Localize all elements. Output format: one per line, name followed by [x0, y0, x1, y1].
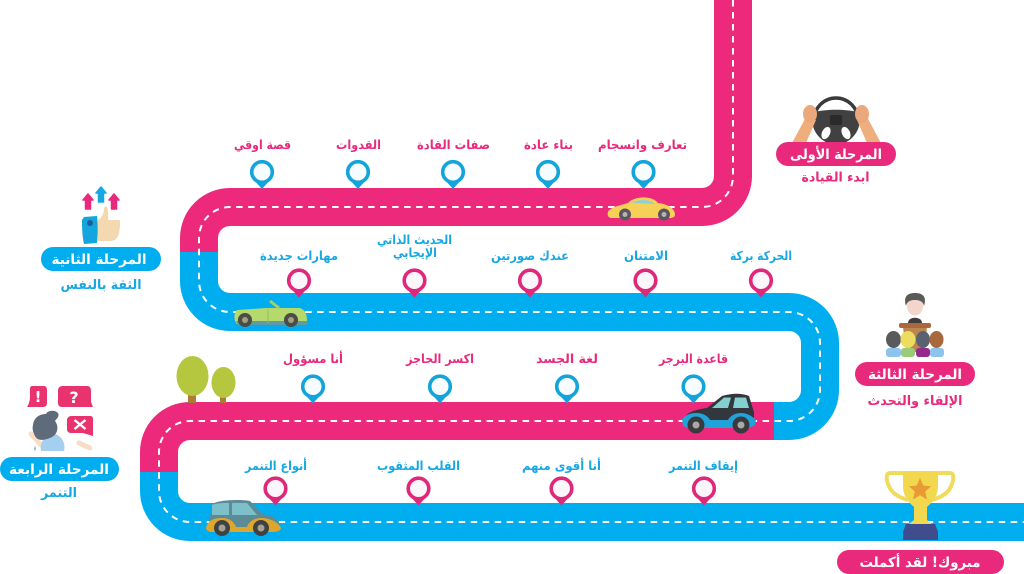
labels: row 3 — [283, 350, 728, 366]
pins: row 4 — [264, 478, 715, 506]
labels: row 1: بناء عادة — [524, 137, 573, 152]
labels: row 1: صفات القادة — [417, 137, 490, 152]
labels: row 2: مهارات جديدة — [260, 248, 338, 263]
labels: row 1: تعارف وانسجام — [598, 137, 687, 153]
labels: row 1 — [234, 137, 687, 153]
labels: row 2 — [260, 232, 792, 263]
labels: row 4 — [244, 457, 738, 473]
car: black SUV — [682, 394, 756, 434]
badge: stage 2 — [41, 247, 161, 271]
icon: thumbs up with arrows — [82, 187, 120, 244]
labels: row 4: إيقاف التنمر — [668, 458, 738, 473]
icon: bullied person with speech bubbles — [27, 386, 93, 451]
subtitle: stage 4: التنمر — [40, 486, 77, 501]
pins: row 1 — [251, 162, 655, 189]
badge: completion — [837, 550, 1004, 574]
labels: row 3: أنا مسؤول — [283, 350, 343, 366]
labels: row 4: أنواع التنمر — [244, 457, 307, 473]
icon: bullied person with speech bubbles: ? — [69, 388, 79, 407]
badge: stage 1: المرحلة الأولى — [790, 146, 882, 163]
badge: stage 1 — [776, 142, 896, 166]
badge: stage 4 — [0, 457, 119, 481]
labels: row 3: قاعدة البرجر — [658, 351, 728, 366]
icon: steering wheel with hands — [792, 98, 881, 144]
road: winding track — [159, 0, 1024, 522]
labels: row 2: عندك صورتين — [491, 248, 569, 263]
labels: row 2: الامتنان — [624, 248, 668, 263]
subtitle: stage 3: الإلقاء والتحدث — [868, 394, 962, 409]
badge: stage 3 — [855, 362, 975, 386]
subtitle: stage 2: الثقة بالنفس — [60, 278, 142, 293]
labels: row 1: قصة اوقي — [234, 137, 291, 152]
icon: bullied person with speech bubbles: ! — [35, 388, 41, 406]
labels: row 3: لغة الجسد — [536, 351, 598, 366]
labels: row 3: اكسر الحاجز — [405, 351, 474, 366]
car: green convertible — [234, 301, 308, 327]
pins: row 2 — [288, 270, 772, 298]
badge: stage 2: المرحلة الثانية — [52, 252, 146, 268]
trees — [176, 356, 236, 403]
labels: row 1: القدوات — [336, 137, 381, 152]
pins: row 3 — [302, 376, 705, 404]
car: teal van — [206, 500, 281, 536]
badge: stage 4: المرحلة الرابعة — [9, 462, 109, 478]
labels: row 4: أنا أقوى منهم — [522, 457, 601, 473]
icon: speaker with audience — [886, 293, 944, 357]
badge: completion: مبروك! لقد أكملت — [860, 553, 980, 571]
labels: row 2: الحركة بركة — [730, 248, 792, 263]
icon: trophy — [887, 471, 953, 540]
subtitle: stage 1: ابدء القيادة — [802, 170, 870, 186]
badge: stage 3: المرحلة الثالثة — [868, 367, 962, 383]
labels: row 4: القلب المثقوب — [377, 458, 460, 473]
labels: row 2: الإيجابي — [393, 245, 437, 260]
car: yellow sedan — [608, 197, 675, 220]
labels: row 2: الحديث الذاتي — [377, 232, 452, 247]
